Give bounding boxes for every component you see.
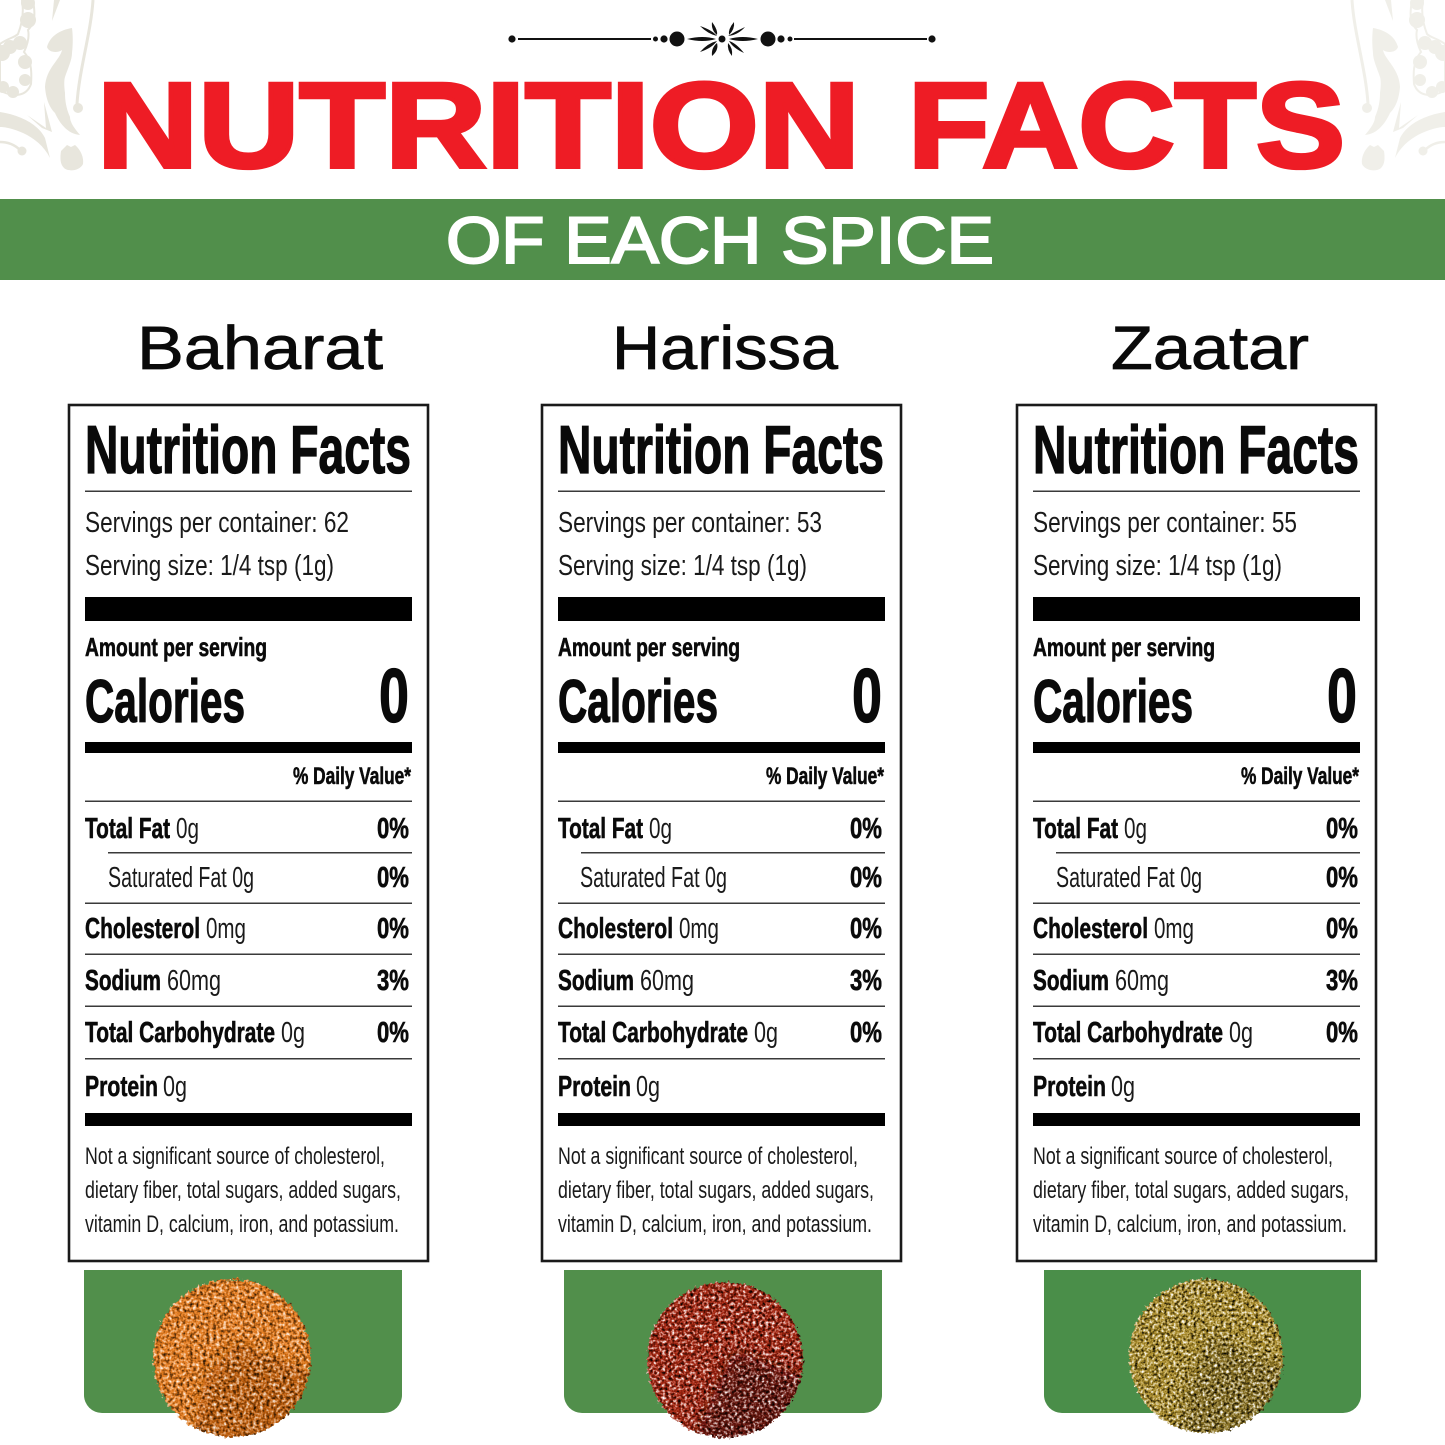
calories row: Calories: [85, 668, 245, 735]
spice name: Baharat: Baharat: [137, 314, 383, 382]
row: protein: Protein: [558, 1071, 631, 1103]
calories row: 0: [379, 654, 409, 739]
row: sodium: 60mg: [640, 965, 694, 997]
row: saturated fat: 0%: [377, 862, 409, 894]
decorative divider flourish: [508, 22, 936, 56]
green banner with subtitle: OF EACH SPICE: [446, 203, 994, 277]
row: total fat: [558, 813, 882, 845]
row: sodium: [558, 965, 882, 997]
row: sodium: 3%: [1326, 965, 1358, 997]
footnote: [1033, 1143, 1349, 1238]
daily value header: % Daily Value*: [766, 763, 884, 790]
row: sodium: [85, 965, 409, 997]
row: sodium: 3%: [377, 965, 409, 997]
footnote: vitamin D, calcium, iron, and potassium.: [85, 1211, 399, 1238]
panel: Baharat nutrition label: [69, 405, 428, 1261]
green tab: Zaatar: [1044, 1270, 1361, 1413]
row: total fat: 0g: [649, 813, 672, 845]
row: total fat: 0%: [850, 813, 882, 845]
row: protein: Protein: [85, 1071, 158, 1103]
row: cholesterol: Cholesterol: [85, 913, 200, 945]
row: total carbohydrate: 0%: [377, 1017, 409, 1049]
daily value header: % Daily Value*: [293, 763, 411, 790]
row: saturated fat: Saturated Fat 0g: [1056, 862, 1202, 894]
row: total carbohydrate: 0%: [1326, 1017, 1358, 1049]
row: total carbohydrate: 0g: [1229, 1017, 1253, 1049]
servings per container: Servings per container: 55: [1033, 507, 1297, 539]
main title: FACTS: [908, 57, 1345, 193]
row: total fat: Total Fat: [85, 813, 170, 845]
row: cholesterol: 0mg: [679, 913, 719, 945]
row: cholesterol: 0%: [1326, 913, 1358, 945]
footnote: dietary fiber, total sugars, added sugars,: [85, 1177, 401, 1204]
calories row: 0: [852, 654, 882, 739]
row: total carbohydrate: Total Carbohydrate: [558, 1017, 748, 1049]
calories row: Calories: [558, 668, 718, 735]
row: total fat: Total Fat: [558, 813, 643, 845]
row: total fat: [85, 813, 409, 845]
row: sodium: Sodium: [558, 965, 634, 997]
footnote: [558, 1143, 874, 1238]
serving size: Serving size: 1/4 tsp (1g): [85, 550, 334, 582]
row: protein: 0g: [163, 1071, 187, 1103]
row: protein: Protein: [1033, 1071, 1106, 1103]
row: saturated fat: 0%: [1326, 862, 1358, 894]
row: total fat: 0g: [1124, 813, 1147, 845]
row: total fat: [1033, 813, 1358, 845]
serving size: Serving size: 1/4 tsp (1g): [558, 550, 807, 582]
icon: Harissa spice mound: [647, 1282, 810, 1445]
row: total carbohydrate: 0g: [754, 1017, 778, 1049]
footnote: [85, 1143, 401, 1238]
amount per serving: Amount per serving: [558, 632, 740, 662]
icon: Zaatar spice mound: [1129, 1279, 1290, 1440]
footnote: Not a significant source of cholesterol,: [1033, 1143, 1333, 1170]
servings per container: Servings per container: 53: [558, 507, 822, 539]
right corner ornament: [1352, 0, 1445, 170]
row: cholesterol: [1033, 913, 1358, 945]
row: total carbohydrate: 0g: [281, 1017, 305, 1049]
row: sodium: 60mg: [1115, 965, 1169, 997]
calories row: [85, 654, 409, 739]
row: saturated fat: 0%: [850, 862, 882, 894]
amount per serving: Amount per serving: [1033, 632, 1215, 662]
panel: Zaatar nutrition label: [1017, 405, 1376, 1261]
row: sodium: 60mg: [167, 965, 221, 997]
footnote: dietary fiber, total sugars, added sugars,: [558, 1177, 874, 1204]
row: total fat: 0%: [1326, 813, 1358, 845]
row: total carbohydrate: Total Carbohydrate: [85, 1017, 275, 1049]
label heading: Nutrition Facts: [558, 412, 884, 488]
row: total fat: 0%: [377, 813, 409, 845]
calories row: [558, 654, 882, 739]
row: cholesterol: 0%: [377, 913, 409, 945]
row: cholesterol: [558, 913, 882, 945]
icon: Baharat spice mound: [152, 1276, 312, 1438]
row: sodium: 3%: [850, 965, 882, 997]
main title: [97, 57, 1345, 193]
footnote: Not a significant source of cholesterol,: [85, 1143, 385, 1170]
green tab: Baharat: [84, 1270, 402, 1413]
spice name: Harissa: Harissa: [612, 314, 838, 382]
serving size: Serving size: 1/4 tsp (1g): [1033, 550, 1282, 582]
green banner with subtitle: [0, 199, 1445, 280]
main title: NUTRITION: [97, 57, 860, 193]
spice name: Zaatar: Zaatar: [1111, 314, 1309, 382]
row: sodium: Sodium: [1033, 965, 1109, 997]
label heading: Nutrition Facts: [85, 412, 411, 488]
row: cholesterol: Cholesterol: [558, 913, 673, 945]
panel: Harissa nutrition label: [542, 405, 901, 1261]
footnote: Not a significant source of cholesterol,: [558, 1143, 858, 1170]
footnote: vitamin D, calcium, iron, and potassium.: [1033, 1211, 1347, 1238]
calories row: Calories: [1033, 668, 1193, 735]
row: total fat: Total Fat: [1033, 813, 1118, 845]
daily value header: % Daily Value*: [1241, 763, 1359, 790]
row: sodium: [1033, 965, 1358, 997]
calories row: [1033, 654, 1357, 739]
row: cholesterol: 0mg: [206, 913, 246, 945]
row: cholesterol: 0mg: [1154, 913, 1194, 945]
calories row: 0: [1327, 654, 1357, 739]
row: total carbohydrate: Total Carbohydrate: [1033, 1017, 1223, 1049]
amount per serving: Amount per serving: [85, 632, 267, 662]
row: cholesterol: Cholesterol: [1033, 913, 1148, 945]
row: total carbohydrate: 0%: [850, 1017, 882, 1049]
row: saturated fat: Saturated Fat 0g: [580, 862, 727, 894]
row: cholesterol: 0%: [850, 913, 882, 945]
left corner ornament: [0, 0, 93, 170]
row: total fat: 0g: [176, 813, 199, 845]
row: cholesterol: [85, 913, 409, 945]
green tab: Harissa: [564, 1270, 882, 1413]
row: protein: 0g: [1111, 1071, 1135, 1103]
servings per container: Servings per container: 62: [85, 507, 349, 539]
row: sodium: Sodium: [85, 965, 161, 997]
row: protein: 0g: [636, 1071, 660, 1103]
footnote: vitamin D, calcium, iron, and potassium.: [558, 1211, 872, 1238]
row: saturated fat: Saturated Fat 0g: [108, 862, 254, 894]
